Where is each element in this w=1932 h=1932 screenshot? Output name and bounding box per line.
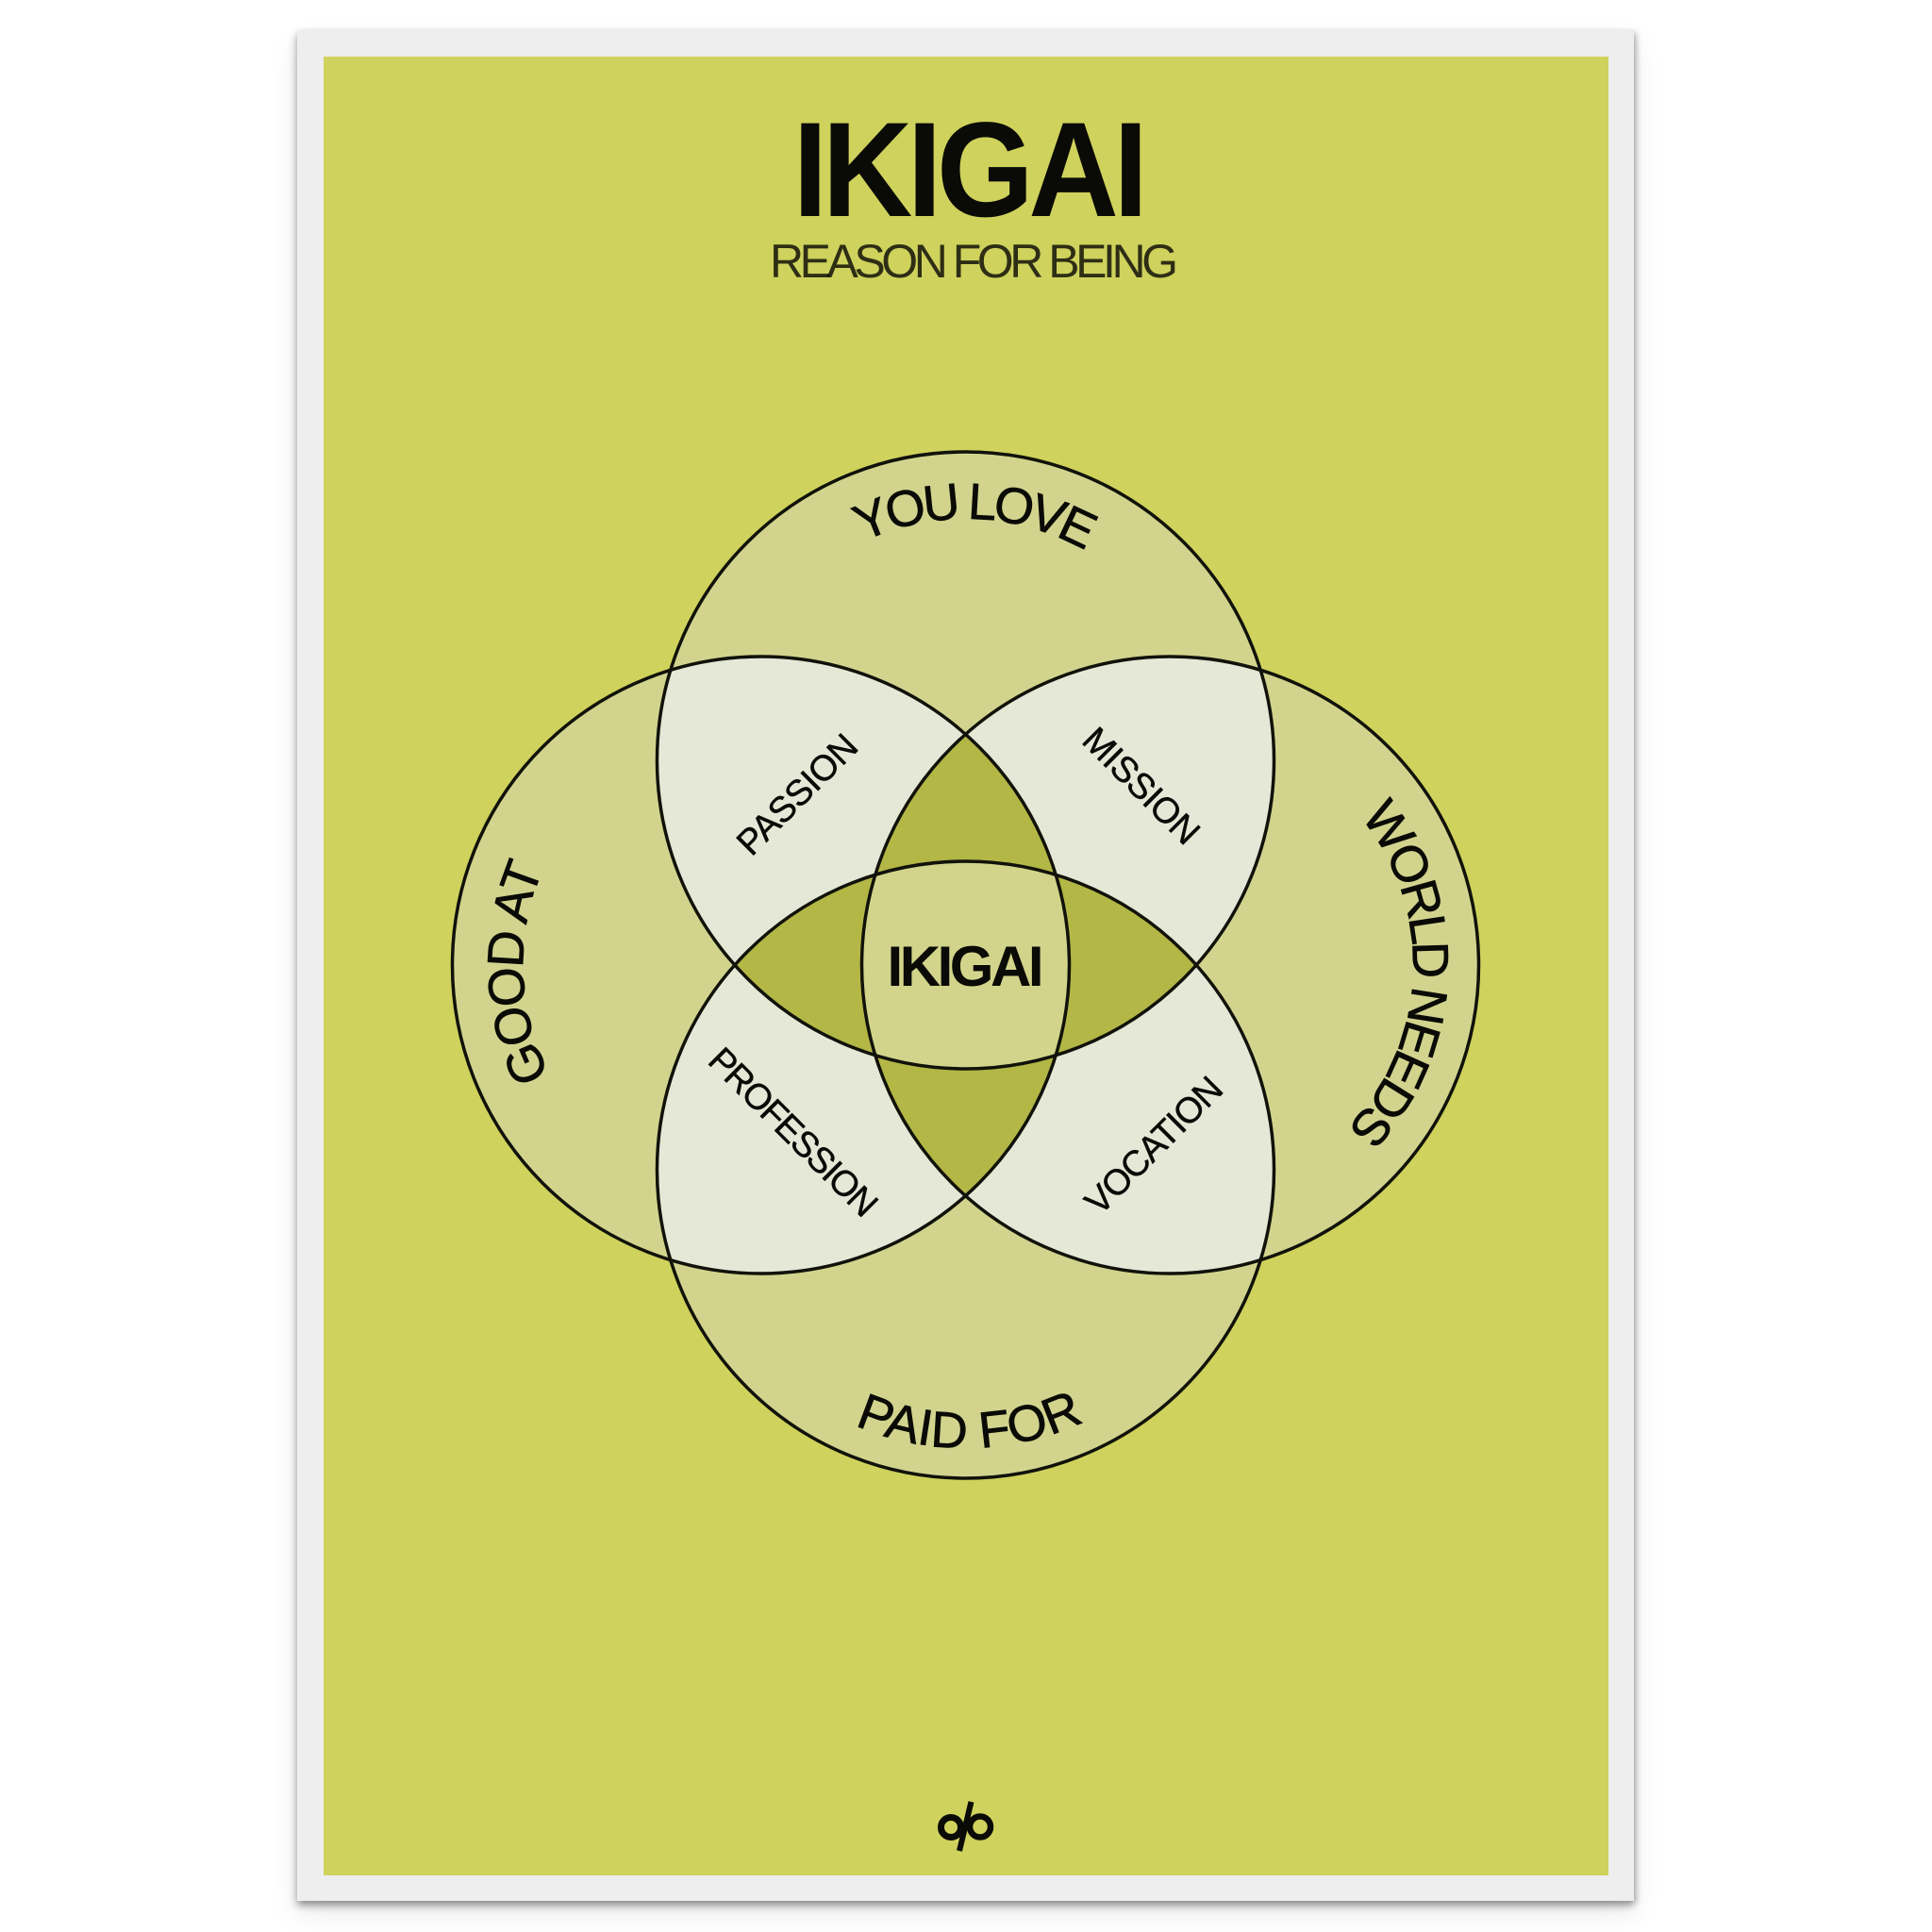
icon: dp logo bbox=[941, 1802, 991, 1851]
label: mission: MISSION bbox=[1074, 720, 1208, 853]
title: IKIGAI bbox=[792, 95, 1143, 245]
poster artwork bbox=[324, 57, 1608, 1875]
center overlap bbox=[863, 862, 1068, 1068]
label: world needs: WORLD NEEDS bbox=[1353, 796, 1449, 1145]
poster frame bbox=[297, 30, 1634, 1901]
label: good at: GOOD AT bbox=[487, 857, 544, 1083]
two-circle overlaps bbox=[658, 658, 1273, 1272]
label: center ikigai: IKIGAI bbox=[887, 935, 1043, 998]
subtitle: REASON FOR BEING bbox=[770, 235, 1178, 288]
label: vocation: VOCATION bbox=[1077, 1069, 1231, 1223]
label: profession: PROFESSION bbox=[700, 1041, 885, 1225]
label: passion: PASSION bbox=[729, 726, 866, 863]
three-circle overlaps bbox=[657, 657, 1479, 1478]
single circle regions bbox=[453, 452, 1479, 1478]
venn diagram bbox=[451, 450, 1481, 1480]
label: you love: YOU LOVE bbox=[849, 483, 1098, 550]
label: paid for: PAID FOR bbox=[858, 1393, 1083, 1448]
circle outlines bbox=[453, 452, 1479, 1478]
poster background bbox=[324, 57, 1608, 1875]
